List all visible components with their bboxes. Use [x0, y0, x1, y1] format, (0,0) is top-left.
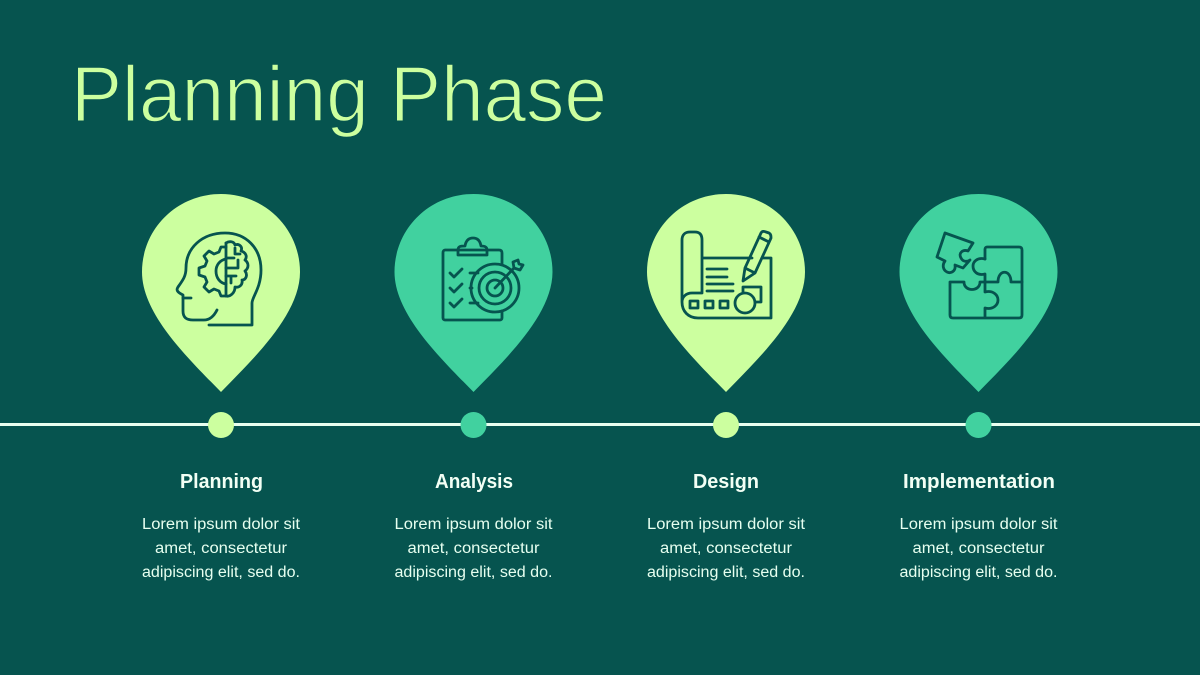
heading: implementation: Implementation — [903, 471, 1055, 493]
heading: design: Design — [693, 471, 759, 493]
pin: design — [647, 194, 805, 392]
dot: implementation — [966, 412, 992, 438]
pin: implementation — [900, 194, 1058, 392]
timeline line — [0, 423, 1200, 426]
dot: planning — [208, 412, 234, 438]
text: implementation — [900, 516, 1058, 581]
text: analysis: Lorem ipsum dolor sit — [394, 516, 553, 533]
text: design: Lorem ipsum dolor sit — [647, 516, 806, 533]
dot: design — [713, 412, 739, 438]
pin: analysis — [394, 194, 552, 392]
heading: planning: Planning — [180, 471, 263, 493]
text: implementation: amet, consectetur — [912, 540, 1044, 557]
heading: analysis: Analysis — [435, 471, 513, 493]
text: implementation: Lorem ipsum dolor sit — [900, 516, 1058, 533]
icon: clipboard and target — [443, 238, 523, 320]
icon: head with gear and brain — [177, 233, 261, 325]
text: planning: Lorem ipsum dolor sit — [142, 516, 301, 533]
text: analysis: adipiscing elit, sed do. — [394, 564, 552, 581]
panel: design — [647, 194, 806, 581]
text: design: adipiscing elit, sed do. — [647, 564, 805, 581]
text: analysis — [394, 516, 553, 581]
panel: implementation — [900, 194, 1058, 581]
text: design: amet, consectetur — [660, 540, 792, 557]
title: Planning Phase — [71, 49, 607, 138]
panel: planning — [142, 194, 301, 581]
pin: planning — [142, 194, 300, 392]
icon: blueprint and pencil — [682, 231, 771, 318]
dot: analysis — [460, 412, 486, 438]
text: implementation: adipiscing elit, sed do. — [900, 564, 1058, 581]
text: analysis: amet, consectetur — [408, 540, 540, 557]
text: planning — [142, 516, 301, 581]
icon: puzzle pieces — [937, 233, 1022, 318]
text: design — [647, 516, 806, 581]
text: planning: amet, consectetur — [155, 540, 287, 557]
panel: analysis — [394, 194, 553, 581]
text: planning: adipiscing elit, sed do. — [142, 564, 300, 581]
